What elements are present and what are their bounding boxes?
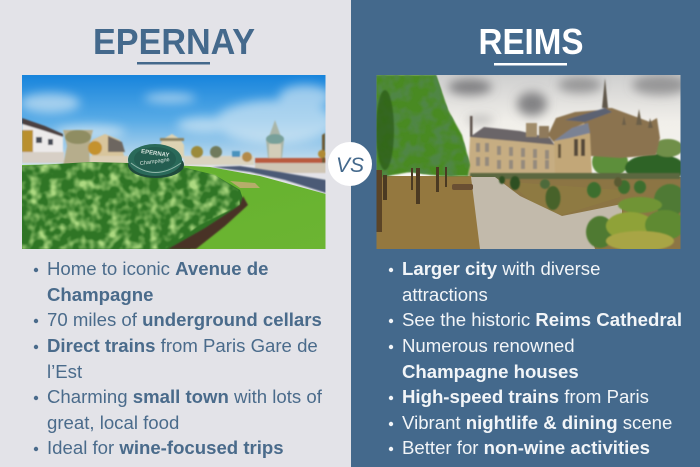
palace xyxy=(470,116,472,138)
foreground bushes xyxy=(586,184,686,251)
item: Reims Cathedral: See the historic Reims Cathedral xyxy=(402,309,682,330)
heading: Reims: REIMS xyxy=(478,21,584,62)
champagne cap: EPERNAY xyxy=(141,149,170,159)
item: Champagne houses: Champagne houses xyxy=(402,361,579,382)
item: Champagne houses: Numerous renowned xyxy=(402,335,575,356)
item: larger city xyxy=(389,258,600,305)
item: high-speed trains: High-speed trains from Paris xyxy=(402,386,649,407)
champagne cap: Champagne xyxy=(140,157,170,167)
ground xyxy=(478,177,680,249)
item: underground cellars: 70 miles of underground cellars xyxy=(47,309,322,330)
list: Epernay highlights xyxy=(34,258,323,458)
topiary xyxy=(546,186,560,210)
panel: Epernay background xyxy=(0,0,351,467)
domed pavilion xyxy=(160,134,184,158)
item: Avenue de Champagne xyxy=(34,258,268,305)
right terrace xyxy=(255,158,326,164)
item: nightlife and dining: Vibrant nightlife & dining scene xyxy=(402,412,672,433)
towers behind xyxy=(526,123,537,137)
item: direct trains: l’Est xyxy=(47,361,83,382)
distant wall xyxy=(184,156,254,165)
panel: Reims background xyxy=(351,0,700,467)
trees xyxy=(376,75,470,232)
list: Reims highlights xyxy=(389,258,682,458)
item: direct trains: Direct trains from Paris Gare de xyxy=(47,335,318,356)
mid buildings xyxy=(92,134,125,160)
heading: Epernay: EPERNAY xyxy=(93,21,255,62)
badge: VS: VS xyxy=(336,154,364,177)
badge: VS xyxy=(328,142,372,186)
champagne cap xyxy=(128,144,184,178)
clock tower xyxy=(266,120,284,158)
item: non-wine activities: Better for non-wine activities xyxy=(402,437,650,458)
lawn xyxy=(22,163,326,249)
item: Champagne houses xyxy=(389,335,579,382)
distant trees right xyxy=(591,138,680,177)
soil edge xyxy=(168,196,248,249)
apse xyxy=(554,123,592,176)
monument xyxy=(63,130,93,166)
item: Avenue de Champagne: Home to iconic Avenue de xyxy=(47,258,268,279)
cathedral body xyxy=(548,108,660,158)
road xyxy=(212,166,326,193)
gravel path xyxy=(471,177,622,249)
item: wine-focused trips: Ideal for wine-focused trips xyxy=(47,437,284,458)
item: small town: Charming small town with lots of xyxy=(47,386,323,407)
item: direct trains xyxy=(34,335,318,382)
photo: Avenue de Champagne, Epernay xyxy=(20,75,335,249)
left building xyxy=(22,123,64,153)
item: small town: great, local food xyxy=(47,412,179,433)
item: larger city: attractions xyxy=(402,284,488,305)
item: Avenue de Champagne: Champagne xyxy=(47,284,153,305)
item: larger city: Larger city with diverse xyxy=(402,258,600,279)
photo: Reims Cathedral and gardens xyxy=(376,75,688,251)
item: small town xyxy=(34,386,323,433)
